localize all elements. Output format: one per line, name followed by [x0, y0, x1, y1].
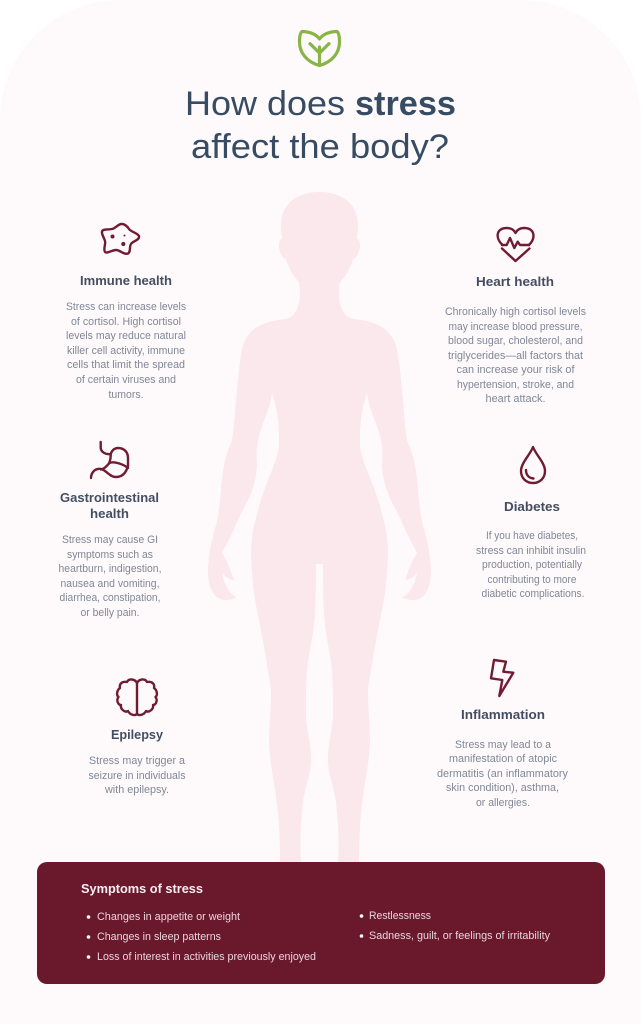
text: heart health body: hypertension, stroke, and	[457, 379, 574, 391]
text: immune health body: levels may reduce natural	[66, 330, 186, 342]
text: heart health body: heart attack.	[486, 393, 546, 405]
heading: symptoms of stress: Symptoms of stress	[81, 881, 203, 896]
text: diabetes body: stress can inhibit insulin	[476, 545, 586, 557]
title: stress	[355, 85, 456, 123]
heading: immune health: Immune health	[80, 273, 172, 288]
text: heart health body: triglycerides—all factors that	[448, 350, 583, 362]
icon: green leaf logo	[300, 32, 340, 66]
text: diabetes body: If you have diabetes,	[486, 530, 578, 542]
text: immune health body	[66, 301, 186, 401]
heading: diabetes: Diabetes	[504, 499, 560, 514]
text: immune health body: Stress can increase levels	[66, 301, 186, 313]
text: gastrointestinal body: Stress may cause GI	[62, 534, 158, 546]
text: immune health body: of certain viruses and	[76, 374, 176, 386]
panel: immune health	[66, 224, 186, 401]
body silhouette	[208, 192, 431, 862]
text: diabetes body: contributing to more	[488, 574, 577, 586]
icon: blood drop	[521, 447, 545, 483]
text: gastrointestinal body: diarrhea, constipation,	[60, 592, 160, 604]
list: symptoms right column: Restlessness	[369, 910, 431, 922]
title: affect the body?	[191, 128, 449, 166]
heading: gastrointestinal health	[60, 490, 159, 521]
list: symptoms left column: Changes in appetite or weight	[97, 911, 240, 923]
panel: inflammation	[437, 660, 569, 809]
panel background	[37, 862, 605, 984]
text: heart health body: Chronically high cortisol levels	[445, 306, 586, 318]
text: epilepsy body: seizure in individuals	[88, 770, 186, 782]
text: heart health body: can increase your risk of	[456, 364, 575, 376]
panel: diabetes	[476, 447, 586, 600]
text: inflammation body: skin condition), asthma,	[446, 782, 559, 794]
heading: inflammation: Inflammation	[461, 707, 545, 722]
list: symptoms left column: Changes in sleep patterns	[97, 931, 221, 943]
icon: lightning bolt	[491, 660, 513, 696]
text: epilepsy body	[88, 755, 186, 796]
text: epilepsy body: with epilepsy.	[104, 784, 169, 796]
title: How does	[185, 85, 345, 123]
text: gastrointestinal body: or belly pain.	[80, 607, 140, 619]
list: symptoms right column	[360, 910, 550, 942]
heading: gastrointestinal health: health	[90, 506, 129, 521]
text: immune health body: of cortisol. High cortisol	[71, 316, 181, 328]
text: inflammation body: or allergies.	[476, 797, 530, 809]
text: immune health body: killer cell activity, immune	[67, 345, 185, 357]
list: symptoms left column: Loss of interest in activities previously enjoyed	[97, 951, 316, 963]
text: gastrointestinal body	[58, 534, 162, 619]
text: heart health body	[445, 306, 586, 405]
panel: heart health	[445, 228, 586, 405]
panel: gastrointestinal health	[58, 442, 162, 619]
heading: gastrointestinal health: Gastrointestinal	[60, 490, 159, 505]
icon: stomach	[91, 442, 128, 478]
text: diabetes body: diabetic complications.	[482, 588, 584, 600]
text: immune health body: tumors.	[108, 389, 144, 401]
text: heart health body: may increase blood pressure,	[448, 321, 582, 333]
icon: brain	[117, 679, 157, 715]
panel: symptoms of stress	[37, 862, 605, 984]
text: heart health body: blood sugar, cholesterol, and	[448, 335, 583, 347]
panel: epilepsy	[88, 679, 186, 796]
heading: epilepsy: Epilepsy	[111, 727, 164, 742]
text: inflammation body: manifestation of atopic	[449, 753, 558, 765]
text: inflammation body: Stress may lead to a	[455, 739, 551, 751]
text: diabetes body	[476, 530, 586, 600]
list: symptoms right column: Sadness, guilt, or feelings of irritability	[369, 930, 550, 942]
title	[185, 85, 456, 166]
text: inflammation body	[437, 739, 569, 809]
text: inflammation body: dermatitis (an inflammatory	[437, 768, 569, 780]
text: immune health body: cells that limit the spread	[67, 359, 185, 371]
icon: heart with pulse	[498, 228, 533, 261]
text: epilepsy body: Stress may trigger a	[89, 755, 185, 767]
text: gastrointestinal body: symptoms such as	[67, 549, 153, 561]
text: gastrointestinal body: nausea and vomiting,	[60, 578, 160, 590]
text: diabetes body: production, potentially	[482, 559, 583, 571]
list: symptoms left column	[87, 911, 316, 963]
icon: immune cell	[102, 224, 139, 254]
heading: heart health: Heart health	[476, 274, 554, 289]
text: gastrointestinal body: heartburn, indigestion,	[58, 563, 162, 575]
